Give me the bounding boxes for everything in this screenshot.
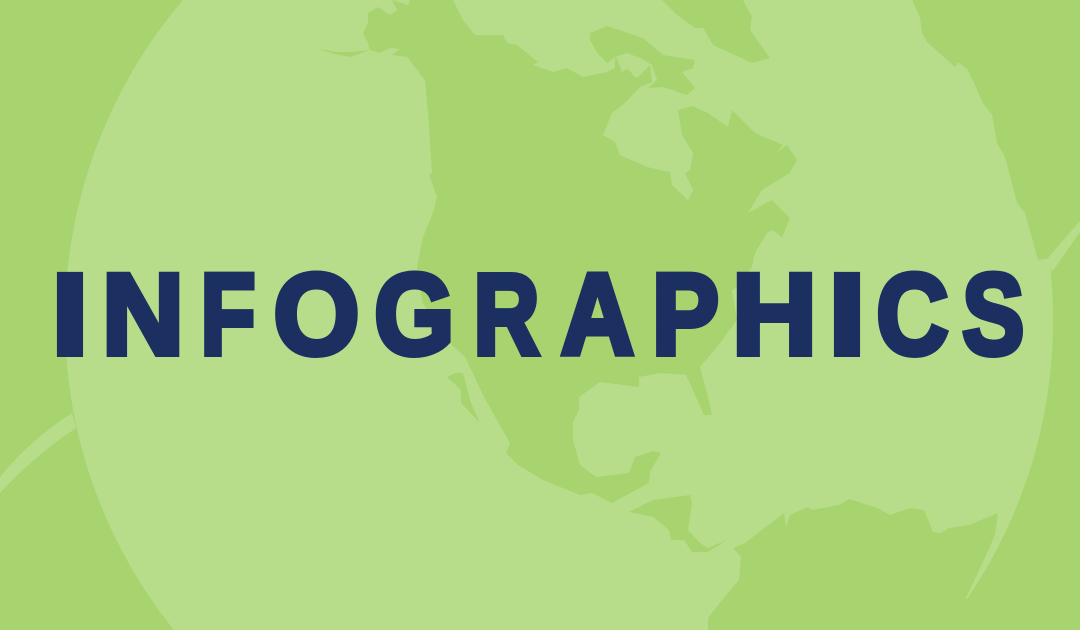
continent: Greenland xyxy=(662,0,770,63)
title: F xyxy=(200,251,256,379)
title: H xyxy=(732,251,817,379)
continent: Baffin Island xyxy=(590,26,695,95)
title: S xyxy=(962,251,1024,379)
orbit ring left xyxy=(0,413,76,493)
orbit ring right xyxy=(1047,220,1080,272)
continent: South America xyxy=(708,499,1000,630)
continent: Central America xyxy=(629,495,727,552)
title: I xyxy=(828,251,866,379)
title: O xyxy=(274,251,360,379)
title: G xyxy=(374,251,454,379)
title: C xyxy=(876,251,948,379)
title: P xyxy=(652,251,719,379)
title: R xyxy=(474,251,540,379)
title: I xyxy=(52,251,88,379)
title: A xyxy=(561,251,634,379)
peninsula: Baja California xyxy=(447,358,480,423)
inlet: Foxe Basin xyxy=(617,55,640,78)
title: N xyxy=(102,251,184,379)
continent: Europe and Africa edge xyxy=(912,0,1080,260)
continent: North America xyxy=(315,0,797,503)
